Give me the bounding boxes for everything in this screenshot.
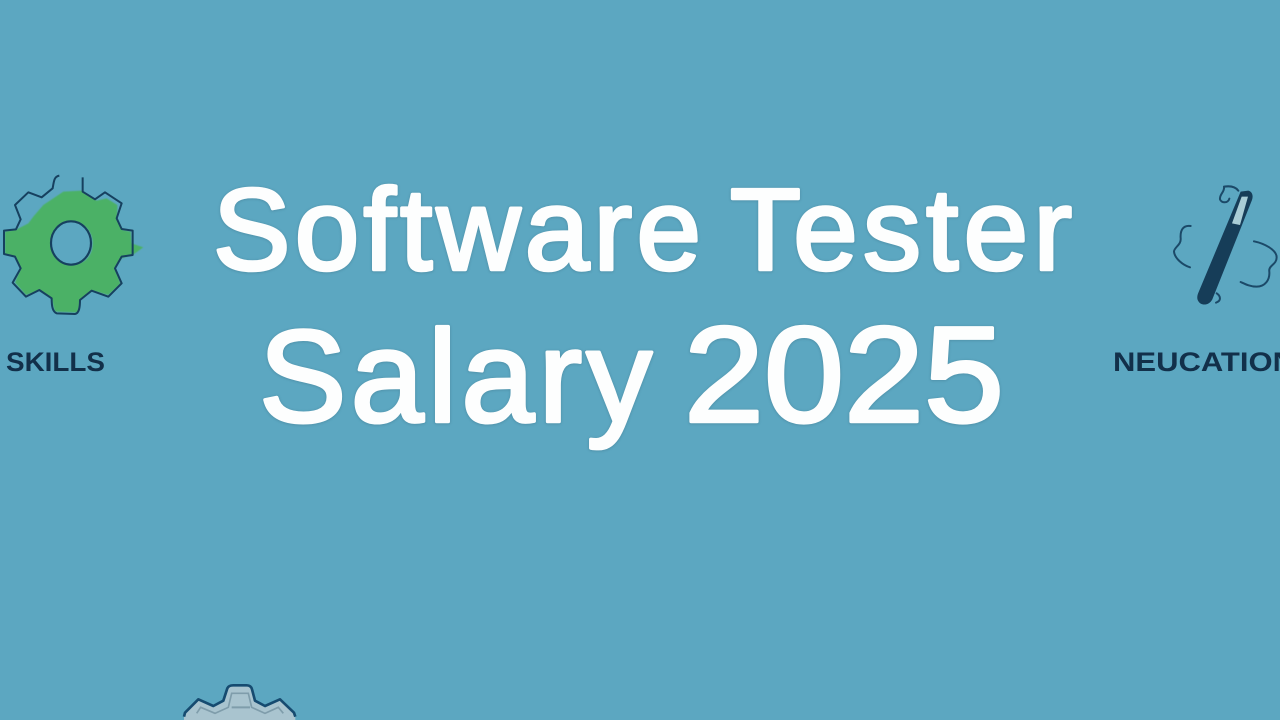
title: Salary (259, 303, 652, 450)
title: 2025 (684, 298, 1004, 450)
label: education: NEUCATION (1113, 347, 1280, 377)
title: 2025 (684, 299, 1004, 451)
title (213, 164, 1072, 451)
title: Software (213, 164, 701, 294)
icon: green gear (skills) (4, 176, 143, 314)
icon: partial grey gear (184, 685, 295, 720)
pen body (1197, 191, 1253, 305)
pen highlight (1232, 197, 1248, 225)
label: skills: SKILLS (6, 347, 105, 377)
title: Salary (259, 302, 652, 450)
title: Tester (730, 165, 1072, 295)
title: Tester (730, 164, 1072, 294)
icon: pen with scribbles (education) (1174, 186, 1277, 305)
title: Software (213, 165, 701, 295)
scribble lines (1174, 186, 1277, 303)
